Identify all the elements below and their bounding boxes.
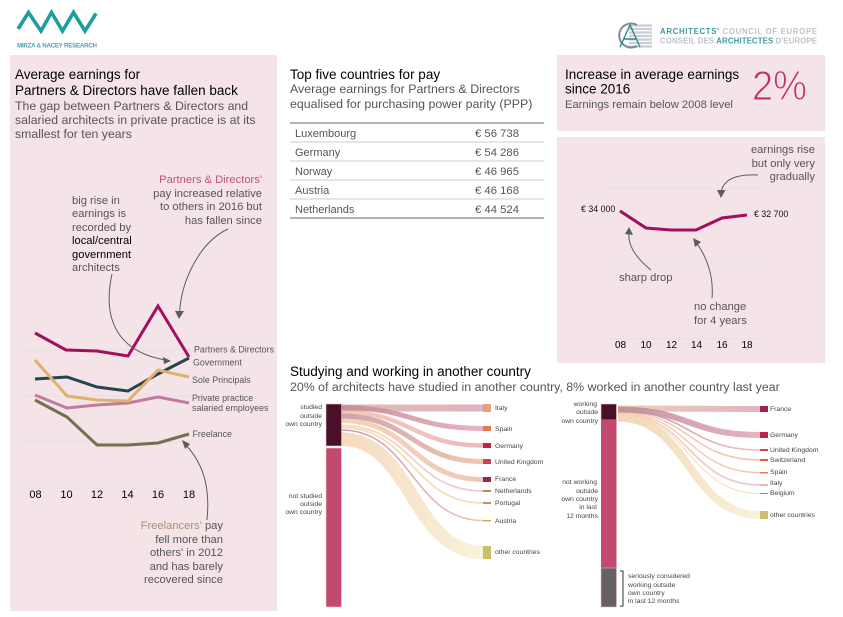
bar: studied: [326, 404, 342, 446]
line: Partners and Directors: [35, 306, 189, 357]
line chart: average earnings: 18: [741, 340, 753, 351]
source labels: own country: [561, 496, 599, 503]
heading: average earnings: Average earnings for: [15, 67, 141, 82]
table: top five countries: € 44 524: [475, 204, 519, 216]
annotation: government architects: big rise in: [72, 195, 120, 207]
source labels: [561, 401, 599, 520]
series labels: salaried employees: [192, 403, 269, 413]
x axis labels: 10: [60, 489, 73, 501]
series labels: Private practice: [192, 393, 253, 403]
bracket label: seriously considered: [628, 573, 690, 580]
annotation: government architects: government: [72, 249, 132, 261]
bar: not working: [601, 420, 616, 568]
annotation: no change: for 4 years: [694, 315, 747, 327]
line chart: average earnings: [581, 188, 788, 351]
source labels: working: [573, 401, 597, 408]
annotation: Partners and Directors: Partners & Directors': [159, 174, 262, 186]
heading: increase in earnings: Earnings remain below 2008 level: [565, 99, 733, 111]
heading: studying and working: [290, 364, 780, 394]
table: top five countries: € 54 286: [475, 147, 519, 159]
annotation: earnings rise: but only very: [752, 158, 815, 170]
line chart: average earnings: 16: [716, 340, 728, 351]
annotation: freelancers: recovered since: [144, 574, 223, 586]
text block: gap description: [15, 99, 256, 141]
annotation: government architects: recorded by: [72, 222, 131, 234]
big number: 2%: 2%: [752, 62, 807, 109]
destination labels: Austria: [495, 518, 516, 525]
line chart: average earnings: € 32 700: [754, 209, 788, 219]
arrow: no change: [693, 238, 712, 298]
x axis labels: 12: [91, 489, 103, 501]
source labels: 12 months: [566, 513, 599, 520]
heading: top five countries: Average earnings for Partners & Directors: [290, 82, 520, 96]
text block: gap description: smallest for ten years: [15, 127, 132, 141]
heading: average earnings: [15, 67, 238, 98]
table: top five countries: Norway: [295, 166, 333, 178]
heading: increase in earnings: Increase in average earnings: [565, 67, 739, 82]
source labels: own country: [561, 418, 599, 425]
destination labels: Germany: [495, 443, 524, 450]
series labels: Sole Principals: [192, 375, 251, 385]
logo: Mirza & Nacey Research: MIRZA & NACEY RESEARCH: [17, 42, 98, 50]
arrow: sharp drop: [625, 227, 651, 270]
destination nodes: [760, 406, 768, 519]
annotation: government architects: earnings is: [72, 208, 127, 220]
destination labels: Italy: [770, 480, 783, 487]
destination labels: United Kingdom: [770, 447, 819, 454]
annotation: government architects: architects: [72, 262, 120, 274]
line: Government: [35, 358, 189, 391]
logo: Architects' Council of Europe: CONSEIL DES ARCHITECTES D'EUROPE: [660, 36, 817, 46]
series labels: Government: [193, 358, 242, 368]
sankey: working outside own country: [561, 401, 819, 607]
series labels: [192, 344, 274, 439]
arrow: earnings rise: [717, 175, 758, 198]
source labels: not studied: [289, 493, 322, 500]
annotation: government architects: [72, 195, 132, 274]
line chart: average earnings: 08: [615, 340, 626, 351]
annotation: freelancers: [141, 520, 223, 586]
line chart: average earnings: € 34 000: [581, 204, 615, 214]
destination labels: [770, 406, 819, 519]
x axis labels: 16: [152, 489, 164, 501]
x axis labels: 18: [183, 489, 195, 501]
annotation: Partners and Directors: has fallen since: [185, 215, 262, 227]
annotation: freelancers: and has barely: [150, 561, 223, 573]
text block: gap description: The gap between Partners & Directors and: [15, 99, 248, 113]
logo: Architects' Council of Europe: [619, 24, 817, 48]
bracket label: own country: [628, 590, 665, 597]
table: top five countries: Luxembourg: [295, 128, 356, 140]
destination labels: other countries: [495, 549, 541, 556]
destination labels: other countries: [770, 512, 816, 519]
destination labels: Spain: [495, 426, 513, 433]
annotation: earnings rise: gradually: [770, 171, 815, 183]
destination labels: Netherlands: [495, 488, 532, 495]
line chart: average earnings: 14: [691, 340, 702, 351]
destination labels: Spain: [770, 469, 788, 476]
annotation: no change: [694, 301, 747, 327]
destination labels: Germany: [770, 432, 799, 439]
destination labels: France: [770, 406, 791, 413]
heading: average earnings: Partners & Directors have fallen back: [15, 83, 238, 98]
line chart: average earnings: 12: [666, 340, 677, 351]
table: top five countries: € 56 738: [475, 128, 519, 140]
source labels: outside: [300, 501, 322, 508]
bracket label: in last 12 months: [628, 598, 680, 605]
table: top five countries: Netherlands: [295, 204, 355, 216]
heading: studying and working: 20% of architects have studied in another country, 8% worked in another country last year: [290, 380, 780, 394]
annotation: freelancers: others' in 2012: [150, 547, 223, 559]
annotation: Partners and Directors: [153, 174, 263, 227]
panel: increase in earnings: [557, 55, 825, 131]
source labels: outside: [576, 409, 598, 416]
line: Sole Principals: [35, 360, 189, 401]
annotation: government architects: local/central: [72, 235, 132, 247]
annotation: Partners and Directors: pay increased relative: [153, 188, 262, 200]
annotation: freelancers: fell more than: [155, 534, 223, 546]
arrow: to government line: [109, 274, 171, 364]
source labels: outside: [576, 488, 598, 495]
annotation: freelancers: Freelancers' pay: [141, 520, 223, 532]
line chart: average earnings: 10: [640, 340, 652, 351]
source labels: in last: [579, 504, 597, 511]
x axis labels: 08: [29, 489, 42, 501]
line chart: earnings by employment type: [21, 306, 274, 501]
source labels: [285, 404, 323, 516]
line: Freelance: [35, 400, 189, 445]
destination labels: Belgium: [770, 490, 795, 497]
bracket label: [627, 573, 690, 605]
table: top five countries: € 46 965: [475, 166, 519, 178]
panel: earnings trend: [557, 137, 825, 363]
series labels: Partners & Directors: [194, 344, 274, 354]
heading: top five countries: equalised for purchasing power parity (PPP): [290, 97, 532, 111]
source labels: studied: [300, 404, 322, 411]
bar: working: [601, 404, 616, 420]
arrow: to partners peak: [175, 229, 228, 319]
heading: top five countries: Top five countries for pay: [290, 67, 440, 82]
annotation: Partners and Directors: to others in 2016 but: [160, 201, 263, 213]
source labels: own country: [285, 421, 323, 428]
source labels: outside: [300, 413, 322, 420]
arrow: to freelance line: [182, 440, 208, 520]
source labels: not working: [562, 479, 597, 486]
destination labels: Switzerland: [770, 457, 805, 464]
x axis labels: 14: [121, 489, 134, 501]
heading: studying and working: Studying and working in another country: [290, 364, 531, 379]
bar: seriously considered: [601, 568, 616, 607]
destination labels: [495, 405, 544, 556]
text block: gap description: salaried architects in private practice is at its: [15, 113, 256, 127]
table: top five countries: € 46 168: [475, 185, 519, 197]
logo: Mirza & Nacey Research: [17, 12, 98, 50]
line: Private practice salaried employees: [35, 395, 189, 408]
x axis labels: [29, 489, 195, 501]
sankey: studied outside own country: [285, 404, 544, 607]
annotation: earnings rise: earnings rise: [751, 144, 815, 156]
logo: Architects' Council of Europe: ARCHITECTS' COUNCIL OF EUROPE: [660, 27, 817, 36]
annotation: earnings rise: [751, 144, 815, 183]
destination labels: United Kingdom: [495, 459, 544, 466]
destination labels: Portugal: [495, 500, 521, 507]
bar: not studied: [326, 448, 342, 607]
source labels: own country: [285, 509, 323, 516]
destination labels: Italy: [495, 405, 508, 412]
heading: increase in earnings: [565, 67, 739, 111]
annotation: sharp drop: sharp drop: [619, 272, 672, 284]
table: top five countries: [290, 123, 544, 218]
panel: average earnings: [10, 55, 277, 611]
destination labels: France: [495, 476, 516, 483]
annotation: no change: no change: [694, 301, 746, 313]
heading: increase in earnings: since 2016: [565, 82, 630, 96]
series labels: Freelance: [192, 429, 232, 439]
bracket label: working outside: [627, 582, 675, 589]
table: top five countries: Germany: [295, 147, 341, 159]
destination nodes: [483, 404, 491, 559]
table: top five countries: Austria: [295, 185, 330, 197]
heading: top five countries: [290, 67, 532, 111]
bracket: [620, 571, 623, 606]
